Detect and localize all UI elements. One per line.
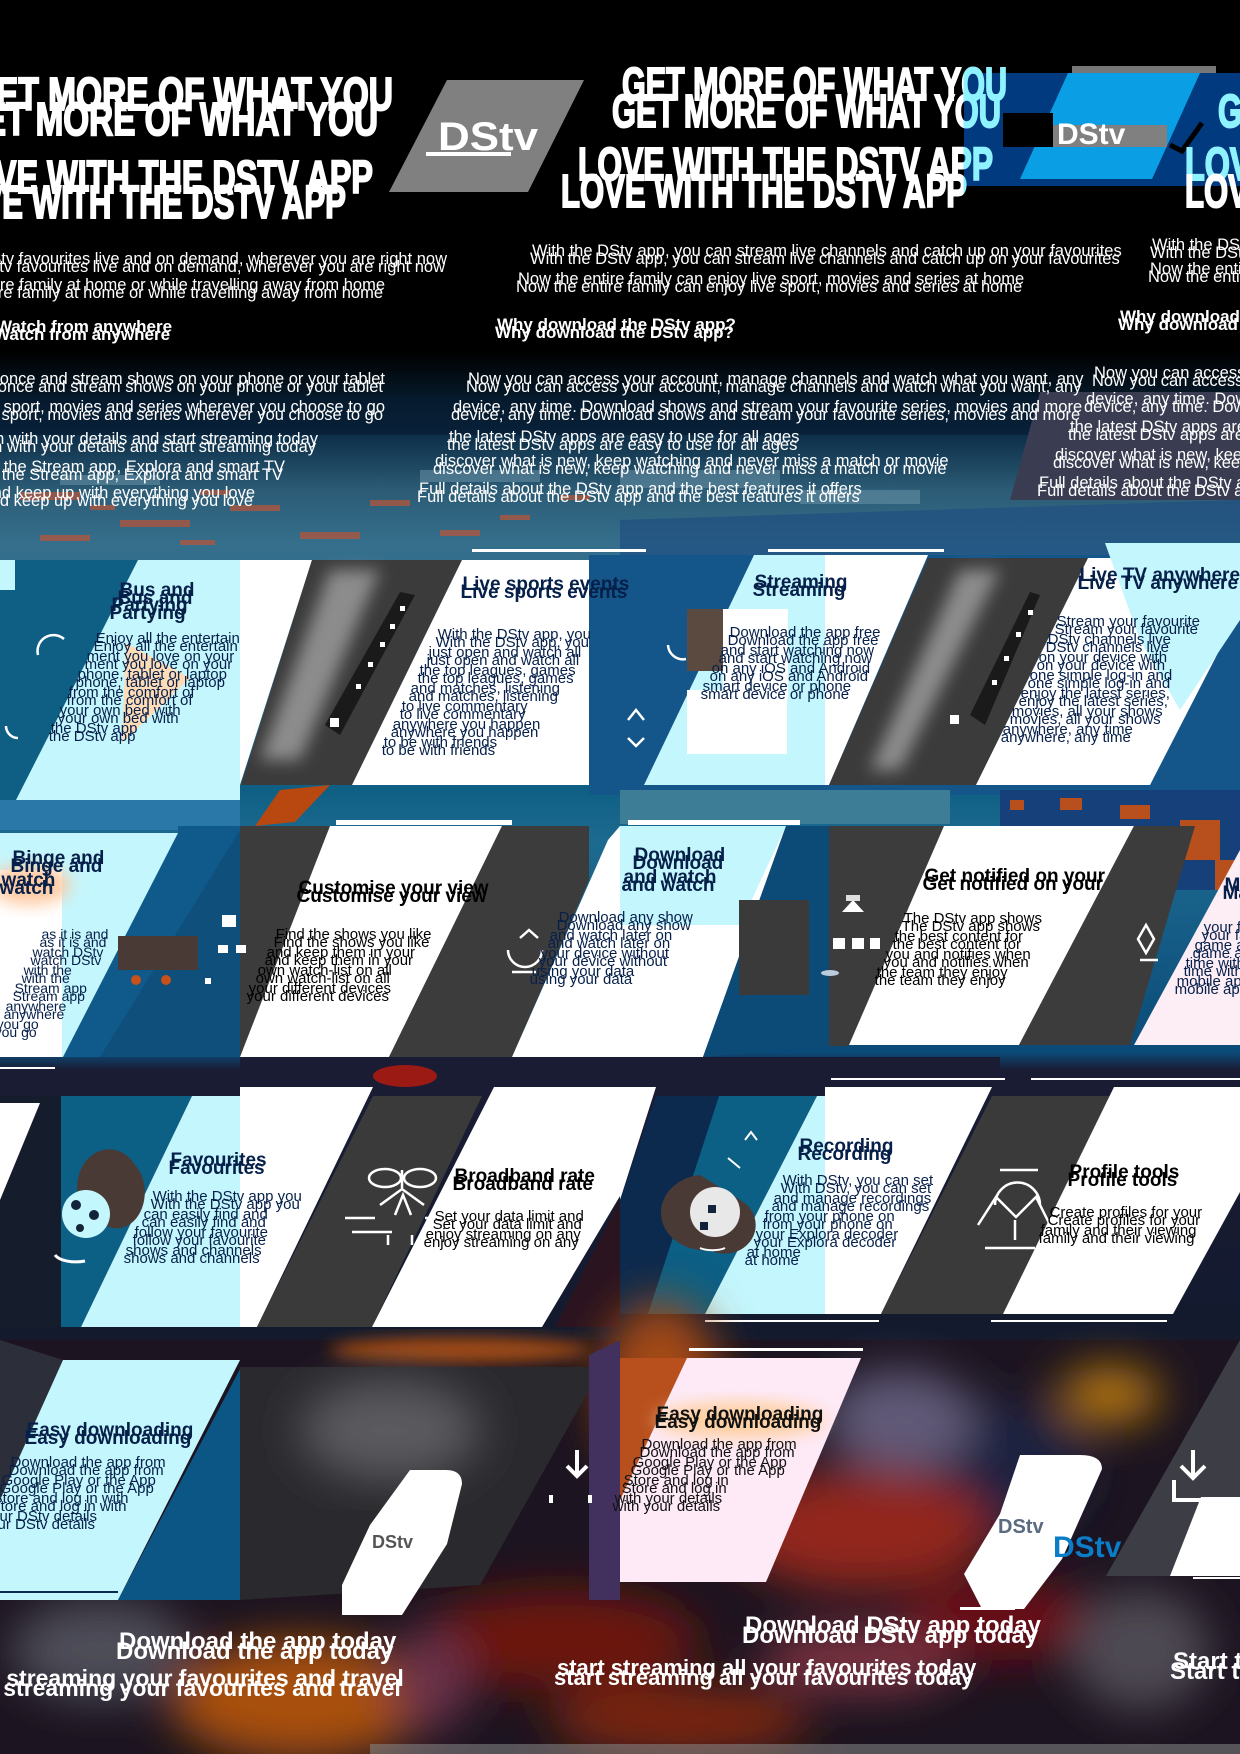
card: live TV anywhere: anywhere, any time bbox=[1003, 721, 1133, 738]
intro text middle: device, any time. Download shows and stream your favourite series, movies and more bbox=[453, 398, 1082, 416]
card: streaming bbox=[701, 572, 881, 702]
intro text middle: discover what is new, keep watching and never miss a match or movie bbox=[435, 452, 949, 470]
card: live TV anywhere: Live TV anywhere bbox=[1080, 565, 1240, 586]
card text: binge body bbox=[0, 926, 108, 1040]
footer text middle: Download DStv app today bbox=[745, 1612, 1041, 1639]
row 4 phone-shaped white blobs with DStv marks: DStv bbox=[998, 1516, 1044, 1538]
card: easy downloading two: with your details bbox=[615, 1490, 722, 1507]
card: customise your viewing: your different devices bbox=[249, 980, 391, 997]
card: binge and watch bbox=[0, 848, 104, 894]
row 2 icons bbox=[131, 895, 1158, 985]
row 3 icons: balls and line art bbox=[55, 1132, 1050, 1262]
card: broadband rate: Broadband rate bbox=[455, 1166, 595, 1187]
card: catch up on your favourites: The DStv app shows bbox=[904, 910, 1042, 927]
card: bundles and partying: Enjoy all the entertain bbox=[96, 630, 240, 647]
card: favourites: can easily find and bbox=[144, 1206, 268, 1223]
card: easy downloading two bbox=[612, 1404, 823, 1514]
card: live TV anywhere: movies, all your shows bbox=[1012, 703, 1163, 720]
card: recording: and manage recordings bbox=[774, 1190, 931, 1207]
card: easy downloading two: Easy downloading bbox=[657, 1404, 823, 1425]
headline middle: LOVE WITH THE DSTV APP bbox=[578, 138, 993, 190]
intro text middle: Now you can access your account, manage channels and watch what you want, any bbox=[468, 370, 1083, 388]
card: streaming: smart device or phone bbox=[703, 678, 851, 695]
card: profile tools: Create profiles for your bbox=[1050, 1204, 1202, 1221]
card: customise your viewing bbox=[246, 878, 489, 1004]
card: bundles and partying: Partying bbox=[112, 595, 188, 616]
row 4 phone-shaped white blobs with DStv marks: DStv bbox=[1053, 1531, 1122, 1564]
row 3 panels bbox=[0, 1087, 1240, 1327]
row 4 phone-shaped white blobs with DStv marks bbox=[342, 1455, 1122, 1615]
card: live events and sports: just open and watch all bbox=[429, 644, 581, 661]
card: streaming: Download the app free bbox=[730, 624, 881, 641]
card: easy downloading two: Download the app from bbox=[642, 1436, 797, 1453]
card: live events and sports: to live commentary bbox=[402, 698, 528, 715]
intro text middle: Why download the DStv app? bbox=[497, 315, 736, 334]
intro text right bbox=[1038, 236, 1240, 496]
card: live TV anywhere: DStv channels live bbox=[1048, 631, 1171, 648]
card: binge and watch: watch bbox=[2, 870, 55, 891]
right DStv logo block: DStv bbox=[1057, 118, 1126, 151]
card: broadband rate: enjoy streaming on any bbox=[426, 1226, 581, 1243]
card: customise your viewing: Find the shows you like bbox=[276, 926, 432, 943]
card: live TV anywhere: Stream your favourite bbox=[1057, 613, 1200, 630]
card: profile tools: Profile tools bbox=[1070, 1162, 1179, 1183]
card: recording bbox=[745, 1136, 934, 1265]
card: download and watch: using your data bbox=[532, 963, 634, 980]
card: live TV anywhere: one simple log-in and bbox=[1030, 667, 1172, 684]
card: favourites: With the DStv app you bbox=[153, 1188, 302, 1205]
headline left bbox=[0, 68, 393, 228]
card: favourites bbox=[124, 1150, 302, 1263]
row 4 download icons bbox=[551, 1450, 1240, 1610]
headline middle: LOVE WITH THE DSTV APP bbox=[561, 165, 967, 217]
card text: binge body: anywhere bbox=[6, 998, 66, 1014]
card: favourites: Favourites bbox=[171, 1150, 267, 1171]
card: bundles and partying: the DStv app bbox=[51, 720, 137, 737]
card: bundles and partying: your own bed with bbox=[60, 702, 181, 719]
card: catch up on your favourites: you and notifies when bbox=[886, 946, 1031, 963]
intro text middle: Now the entire family can enjoy live sport, movies and series at home bbox=[518, 270, 1024, 288]
row 4 phone-shaped white blobs with DStv marks: DStv bbox=[372, 1532, 413, 1552]
card text: binge body: with the bbox=[24, 962, 72, 978]
card: bundles and partying: ment you love on your bbox=[87, 648, 234, 665]
intro text middle: Full details about the DStv app and the best features it offers bbox=[419, 480, 862, 498]
intro text middle: With the DStv app, you can stream live channels and catch up on your favourites bbox=[532, 242, 1122, 260]
card: recording: Recording bbox=[800, 1136, 893, 1157]
card: profile tools: family and their viewing bbox=[1041, 1222, 1197, 1239]
dithered bottom band bbox=[370, 1744, 1240, 1754]
card: catch up on your favourites: the team they enjoy bbox=[877, 964, 1008, 981]
row 2 panels bbox=[0, 826, 1240, 1057]
card: favourites: shows and channels bbox=[126, 1242, 262, 1259]
card text: binge body: Stream app bbox=[15, 980, 87, 996]
row 4 cyan panel bbox=[0, 1340, 240, 1600]
card: live events and sports: With the DStv app, you bbox=[438, 626, 591, 643]
card: live events and sports: to be with friends bbox=[384, 734, 497, 751]
footer text left: Download the app today bbox=[119, 1628, 396, 1655]
card: download and watch: Download any show bbox=[559, 909, 693, 926]
intro text left: Watch from anywhere bbox=[0, 317, 172, 336]
footer text middle second line: start streaming all your favourites today bbox=[557, 1655, 976, 1680]
card: bundles and partying: Bus and bbox=[120, 580, 194, 601]
card: live TV anywhere bbox=[1001, 565, 1240, 745]
card: recording: your Explora decoder bbox=[756, 1226, 898, 1243]
right DStv logo block bbox=[964, 66, 1240, 186]
intro text middle bbox=[418, 242, 1122, 506]
card: profile tools bbox=[1038, 1162, 1202, 1246]
headline middle: GET MORE OF WHAT YOU bbox=[622, 58, 1007, 110]
card: catch up on your favourites bbox=[874, 866, 1105, 988]
card: bundles and partying: from the comfort of bbox=[69, 684, 195, 701]
card: customise your viewing: Customise your view bbox=[299, 878, 489, 899]
card: download and watch: and watch later on bbox=[550, 927, 672, 944]
card: live TV anywhere: on your device with bbox=[1039, 649, 1167, 666]
card text: binge body: watch DStv bbox=[33, 944, 103, 960]
card text: binge body: as it is and bbox=[42, 926, 108, 942]
headline right bbox=[1185, 85, 1240, 217]
card: live events and sports bbox=[382, 574, 629, 755]
row 4 pink panel bbox=[620, 1348, 863, 1582]
blue backing band row 1 right bbox=[589, 555, 1240, 795]
card: easy downloading two: Store and log in bbox=[624, 1472, 729, 1489]
card: streaming: and start watching now bbox=[721, 642, 874, 659]
card: live events and sports: and matches, listening bbox=[411, 680, 560, 697]
card: easy downloading: Easy downloading bbox=[27, 1420, 193, 1441]
headline middle: GET MORE OF WHAT YOU bbox=[612, 85, 1001, 137]
card: favourites: follow your favourite bbox=[135, 1224, 268, 1241]
card: catch up on your favourites: the best content for bbox=[895, 928, 1023, 945]
card: live events and sports: the top leagues, games bbox=[420, 662, 576, 679]
ocean backdrop with speckles bbox=[0, 392, 1240, 560]
card: easy downloading: Google Play or the App bbox=[2, 1472, 156, 1489]
row 1 line icons and remotes bbox=[6, 592, 1040, 746]
card: binge and watch: Binge and bbox=[13, 848, 104, 869]
card: streaming: on any iOS and Android bbox=[712, 660, 870, 677]
row 4 blurred photo artwork bbox=[0, 1300, 1240, 1754]
left DStv logo block: DStv bbox=[438, 115, 539, 159]
row gaps with orange streaks bbox=[0, 785, 1240, 1087]
card: download and watch: your device without bbox=[541, 945, 669, 962]
intro text middle: the latest DStv apps are easy to use for all ages bbox=[449, 428, 799, 446]
thin light lines between rows bbox=[0, 549, 1240, 1593]
card: download and watch: Download bbox=[635, 845, 725, 866]
card: download and watch bbox=[530, 845, 725, 987]
card: catch up on your favourites: Get notified on your bbox=[925, 866, 1105, 887]
card: customise your viewing: own watch-list on all bbox=[258, 962, 392, 979]
card: broadband rate bbox=[424, 1166, 595, 1250]
card: recording: from your phone on bbox=[765, 1208, 895, 1225]
card: recording: at home bbox=[747, 1244, 801, 1261]
card: bundles and partying: phone, tablet or laptop bbox=[78, 666, 227, 683]
card: customise your viewing: and keep them in your bbox=[267, 944, 415, 961]
left DStv logo block bbox=[389, 80, 584, 192]
card: bundles and partying bbox=[49, 580, 240, 744]
intro text left bbox=[0, 250, 448, 510]
card: easy downloading: Download the app from bbox=[11, 1454, 166, 1471]
card: recording: With DStv, you can set bbox=[783, 1172, 933, 1189]
card: live TV anywhere: enjoy the latest series, bbox=[1021, 685, 1170, 702]
card: broadband rate: Set your data limit and bbox=[435, 1208, 584, 1225]
card: streaming: Streaming bbox=[755, 572, 847, 593]
card: right edge bbox=[1176, 875, 1240, 997]
card: download and watch: and watch bbox=[624, 867, 716, 888]
card: easy downloading bbox=[0, 1420, 193, 1529]
card: live events and sports: Live sports events bbox=[463, 574, 629, 595]
card: easy downloading two: Google Play or the App bbox=[633, 1454, 787, 1471]
headline middle bbox=[561, 58, 1007, 217]
row 1 panels bbox=[0, 543, 1240, 800]
card: live events and sports: anywhere you happen bbox=[393, 716, 540, 733]
